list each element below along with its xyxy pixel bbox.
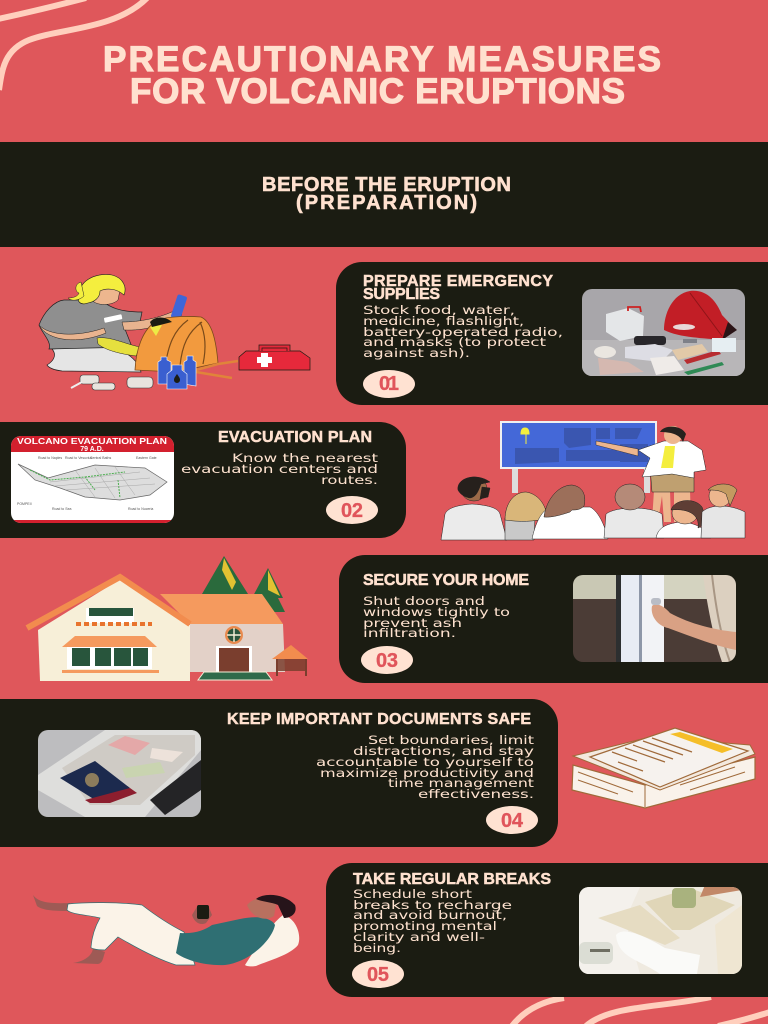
- heading: SUPPLIES: [363, 286, 440, 303]
- body text: distractions, and stay: [353, 744, 534, 758]
- image: volcano evacuation map: Road to Nuceria: [128, 507, 153, 511]
- illustration: stack of documents: [572, 728, 755, 808]
- body text: medicine, flashlight,: [363, 314, 524, 328]
- illustration: person lying down with phone: [33, 895, 299, 966]
- image: volcano evacuation map: [11, 436, 174, 523]
- number badge 02: 02: [341, 500, 363, 522]
- photo: emergency kit: [582, 289, 745, 376]
- panel: secure your home: [339, 555, 768, 683]
- panel: section header band: [0, 142, 768, 247]
- number badge 01: 01: [379, 373, 399, 395]
- body text: [316, 733, 535, 801]
- body text: Know the nearest: [232, 451, 379, 465]
- body text: routes.: [321, 473, 378, 487]
- number badge 05: [352, 960, 404, 988]
- number badge 03: 03: [376, 650, 398, 672]
- heading: [363, 273, 553, 303]
- illustration: woman packing emergency supplies: [39, 274, 238, 390]
- heading: PREPARE EMERGENCY: [363, 273, 553, 290]
- heading: KEEP IMPORTANT DOCUMENTS SAFE: [227, 711, 531, 728]
- image: volcano evacuation map: Central Baths: [90, 456, 111, 460]
- section heading: BEFORE THE ERUPTION: [262, 174, 511, 196]
- body text: Shut doors and: [363, 594, 485, 608]
- body text: and avoid burnout,: [353, 908, 507, 922]
- image: volcano evacuation map: Eastern Gate: [136, 456, 157, 460]
- body text: [353, 887, 512, 955]
- image: volcano evacuation map: VOLCANO EVACUATION PLAN: [17, 436, 167, 446]
- body text: against ash).: [363, 346, 470, 360]
- section heading: [262, 174, 511, 214]
- body text: maximize productivity and: [320, 766, 534, 780]
- body text: [363, 303, 563, 360]
- photo: hand closing window: [573, 575, 736, 662]
- number badge 02: [326, 496, 378, 524]
- body text: and masks (to protect: [363, 335, 547, 349]
- panel: prepare emergency supplies: [336, 262, 768, 405]
- section heading: (PREPARATION): [296, 192, 477, 214]
- image: volcano evacuation map: Road to Vesuvius: [65, 456, 92, 460]
- body text: promoting mental: [353, 919, 497, 933]
- image: volcano evacuation map: POMPEII: [17, 502, 32, 506]
- illustration: evacuation map board and crowd: [441, 422, 745, 540]
- body text: evacuation centers and: [181, 462, 378, 476]
- number badge 03: [361, 646, 413, 674]
- number badge 05: 05: [367, 964, 389, 986]
- body text: breaks to recharge: [353, 898, 512, 912]
- image: volcano evacuation map: Road to Naples: [38, 456, 62, 460]
- panel: keep important documents safe: [0, 699, 558, 847]
- number badge 04: [486, 806, 538, 834]
- image: volcano evacuation map: 79 A.D.: [80, 446, 104, 453]
- heading: SECURE YOUR HOME: [363, 572, 529, 589]
- icon: first aid box: [239, 345, 310, 370]
- title: PRECAUTIONARY MEASURES: [103, 40, 661, 79]
- heading: EVACUATION PLAN: [218, 429, 372, 446]
- body text: clarity and well-: [353, 930, 485, 944]
- body text: [363, 594, 510, 640]
- body text: Stock food, water,: [363, 303, 515, 317]
- body text: time management: [388, 776, 535, 790]
- title: FOR VOLCANIC ERUPTIONS: [130, 72, 625, 111]
- body text: [181, 451, 379, 487]
- number badge 04: 04: [501, 810, 524, 832]
- body text: infiltration.: [363, 626, 456, 640]
- body text: being.: [353, 941, 401, 955]
- photo: documents in safe box: [38, 730, 201, 817]
- body text: effectiveness.: [418, 787, 534, 801]
- body text: Schedule short: [353, 887, 473, 901]
- heading: TAKE REGULAR BREAKS: [353, 871, 551, 888]
- illustration: house with trees: [27, 556, 308, 681]
- body text: prevent ash: [363, 616, 462, 630]
- image: volcano evacuation map: Road to Sea: [52, 507, 72, 511]
- number badge 01: [363, 370, 415, 398]
- panel: evacuation plan: [0, 422, 406, 538]
- body text: Set boundaries, limit: [368, 733, 535, 747]
- title: [103, 40, 661, 111]
- body text: battery-operated radio,: [363, 325, 563, 339]
- body text: windows tightly to: [363, 605, 510, 619]
- panel: take regular breaks: [326, 863, 768, 997]
- photo: reading in bed: [579, 885, 742, 974]
- body text: accountable to yourself to: [316, 755, 534, 769]
